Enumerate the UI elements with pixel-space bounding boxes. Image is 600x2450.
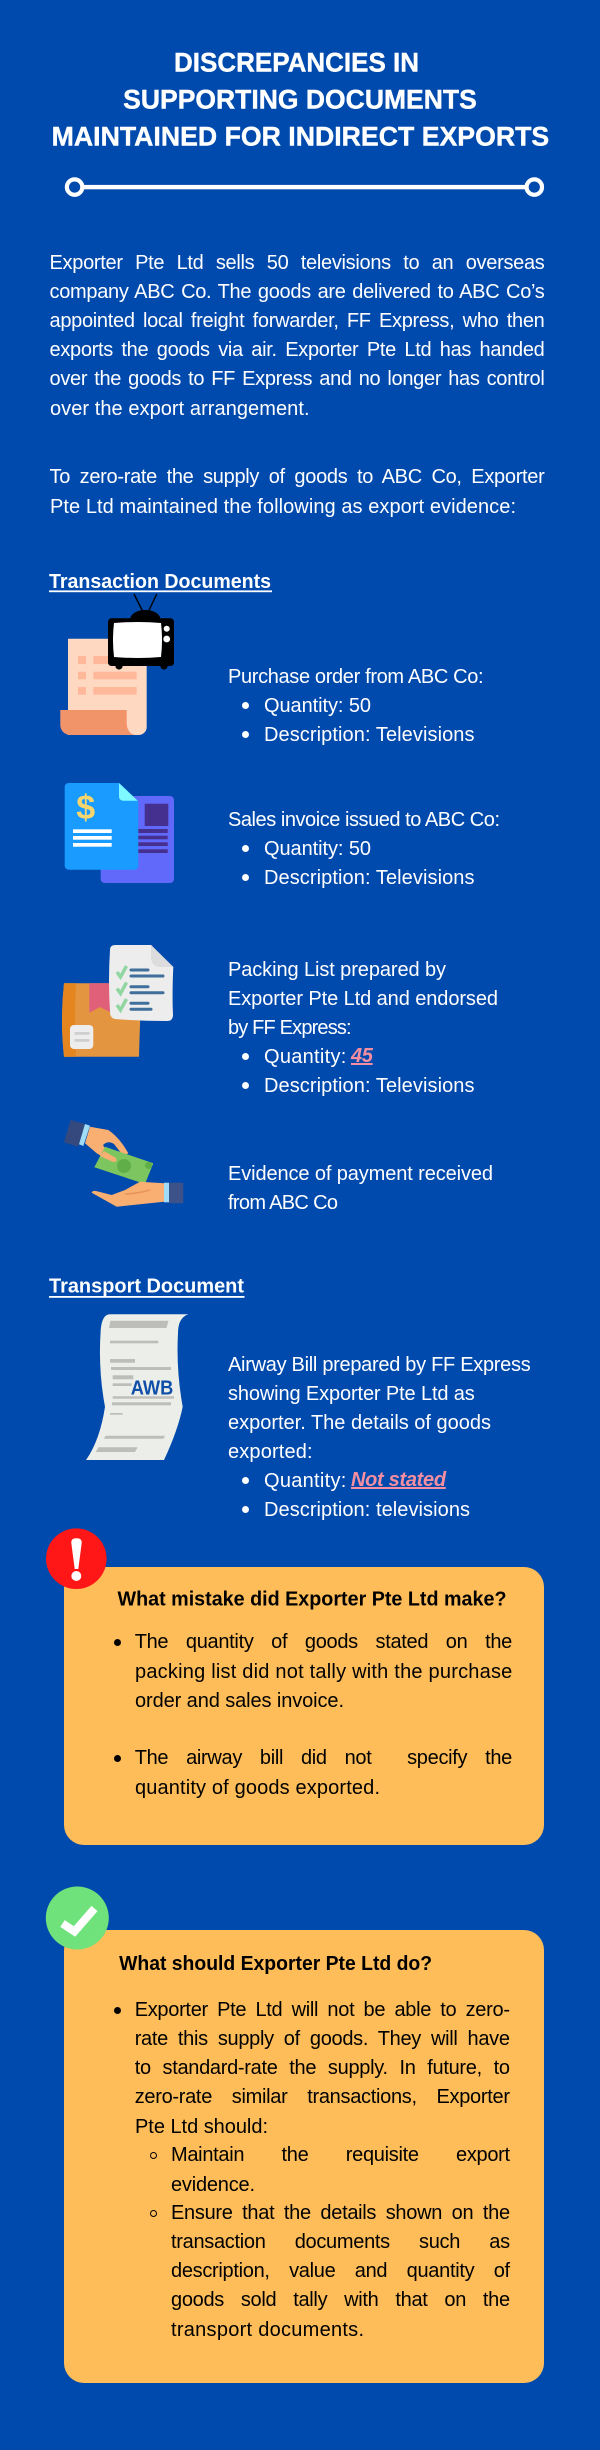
title <box>52 48 549 152</box>
action list: evidence. <box>171 2174 255 2196</box>
text: packing list <box>228 959 498 1097</box>
action list: transaction documents such as <box>171 2231 510 2253</box>
intro paragraph: over the export arrangement. <box>50 398 309 420</box>
icon: purchase order with television <box>60 594 174 735</box>
mistake list: order and sales invoice. <box>135 1690 344 1712</box>
action list: transport documents. <box>171 2319 364 2341</box>
icon: airway bill <box>86 1314 188 1460</box>
text: airway bill: exporter. The details of goods <box>228 1412 491 1434</box>
heading: what mistake: What mistake did Exporter Pte Ltd make? <box>117 1588 506 1610</box>
evidence intro paragraph: Pte Ltd maintained the following as export evidence: <box>50 496 516 518</box>
text: purchase order: Quantity: 50 <box>264 695 371 717</box>
text: packing list: by FF Express: <box>228 1017 351 1039</box>
text: evidence of payment <box>228 1163 493 1214</box>
icon: red exclamation badge <box>46 1528 107 1589</box>
action list: to standard-rate the supply. In future, to <box>135 2057 510 2079</box>
text: airway bill: Quantity: <box>264 1470 346 1492</box>
panel: what should do <box>64 1930 544 2383</box>
panel: what mistake <box>64 1567 544 1845</box>
action list: Ensure that the details shown on the <box>171 2202 510 2224</box>
text: purchase order <box>228 666 483 746</box>
action list: rate this supply of goods. They will have <box>135 2028 510 2050</box>
intro paragraph: over the goods to FF Express and no longer has control <box>50 368 544 390</box>
text: airway bill <box>228 1354 530 1521</box>
text: airway bill: showing Exporter Pte Ltd as <box>228 1383 474 1405</box>
text: airway bill: Not stated <box>351 1469 446 1491</box>
icon: parcel with packing list <box>62 945 174 1057</box>
title: DISCREPANCIES IN <box>174 48 419 78</box>
action list: description, value and quantity of <box>171 2260 510 2282</box>
intro paragraph: exports the goods via air. Exporter Pte Ltd has handed <box>50 339 544 361</box>
action list: goods sold tally with that on the <box>171 2289 510 2311</box>
action list <box>114 1999 510 2341</box>
mistake list <box>114 1631 512 1799</box>
title divider with end rings <box>64 177 544 197</box>
text: evidence of payment: from ABC Co <box>228 1192 338 1214</box>
text: packing list: Description: Televisions <box>264 1075 474 1097</box>
action list: zero-rate similar transactions, Exporter <box>135 2086 510 2108</box>
evidence intro paragraph <box>50 466 544 518</box>
icon: hands exchanging payment <box>64 1120 184 1207</box>
intro paragraph <box>50 252 544 420</box>
text: sales invoice <box>228 809 500 889</box>
text: packing list: Quantity: <box>264 1046 346 1068</box>
icon: airway bill: AWB <box>131 1378 173 1400</box>
action list: Maintain the requisite export <box>171 2144 510 2166</box>
text: packing list: Packing List prepared by <box>228 959 446 981</box>
text: airway bill: exported: <box>228 1441 312 1463</box>
text: packing list: Exporter Pte Ltd and endorsed <box>228 988 498 1010</box>
mistake list: packing list did not tally with the purchase <box>135 1661 512 1683</box>
heading: what should do: What should Exporter Pte Ltd do? <box>119 1953 432 1975</box>
icon: sales invoice documents: $ <box>76 789 95 827</box>
text: evidence of payment: Evidence of payment received <box>228 1163 493 1185</box>
evidence intro paragraph: To zero-rate the supply of goods to ABC Co, Exporter <box>50 466 544 488</box>
action list: Exporter Pte Ltd will not be able to zero- <box>135 1999 510 2021</box>
intro paragraph: appointed local freight forwarder, FF Express, who then <box>50 310 544 332</box>
heading: transaction documents: Transaction Documents <box>49 570 271 593</box>
action list: Pte Ltd should: <box>135 2116 268 2138</box>
icon: sales invoice documents <box>64 783 174 883</box>
text: packing list: 45 <box>351 1045 373 1067</box>
heading: transport document: Transport Document <box>49 1275 244 1298</box>
intro paragraph: company ABC Co. The goods are delivered to ABC Co’s <box>50 281 544 303</box>
text: airway bill: Airway Bill prepared by FF Express <box>228 1354 530 1376</box>
intro paragraph: Exporter Pte Ltd sells 50 televisions to an overseas <box>50 252 544 274</box>
text: sales invoice: Sales invoice issued to ABC Co: <box>228 809 500 831</box>
text: purchase order: Description: Televisions <box>264 724 474 746</box>
text: airway bill: Description: televisions <box>264 1499 470 1521</box>
text: sales invoice: Description: Televisions <box>264 867 474 889</box>
text: purchase order: Purchase order from ABC Co: <box>228 666 483 688</box>
text: sales invoice: Quantity: 50 <box>264 838 371 860</box>
mistake list: The quantity of goods stated on the <box>135 1631 512 1653</box>
title: SUPPORTING DOCUMENTS <box>123 84 477 114</box>
mistake list: The airway bill did not specify the <box>135 1747 512 1769</box>
icon: green check badge <box>46 1886 109 1950</box>
mistake list: quantity of goods exported. <box>135 1777 380 1799</box>
title: MAINTAINED FOR INDIRECT EXPORTS <box>52 122 549 152</box>
